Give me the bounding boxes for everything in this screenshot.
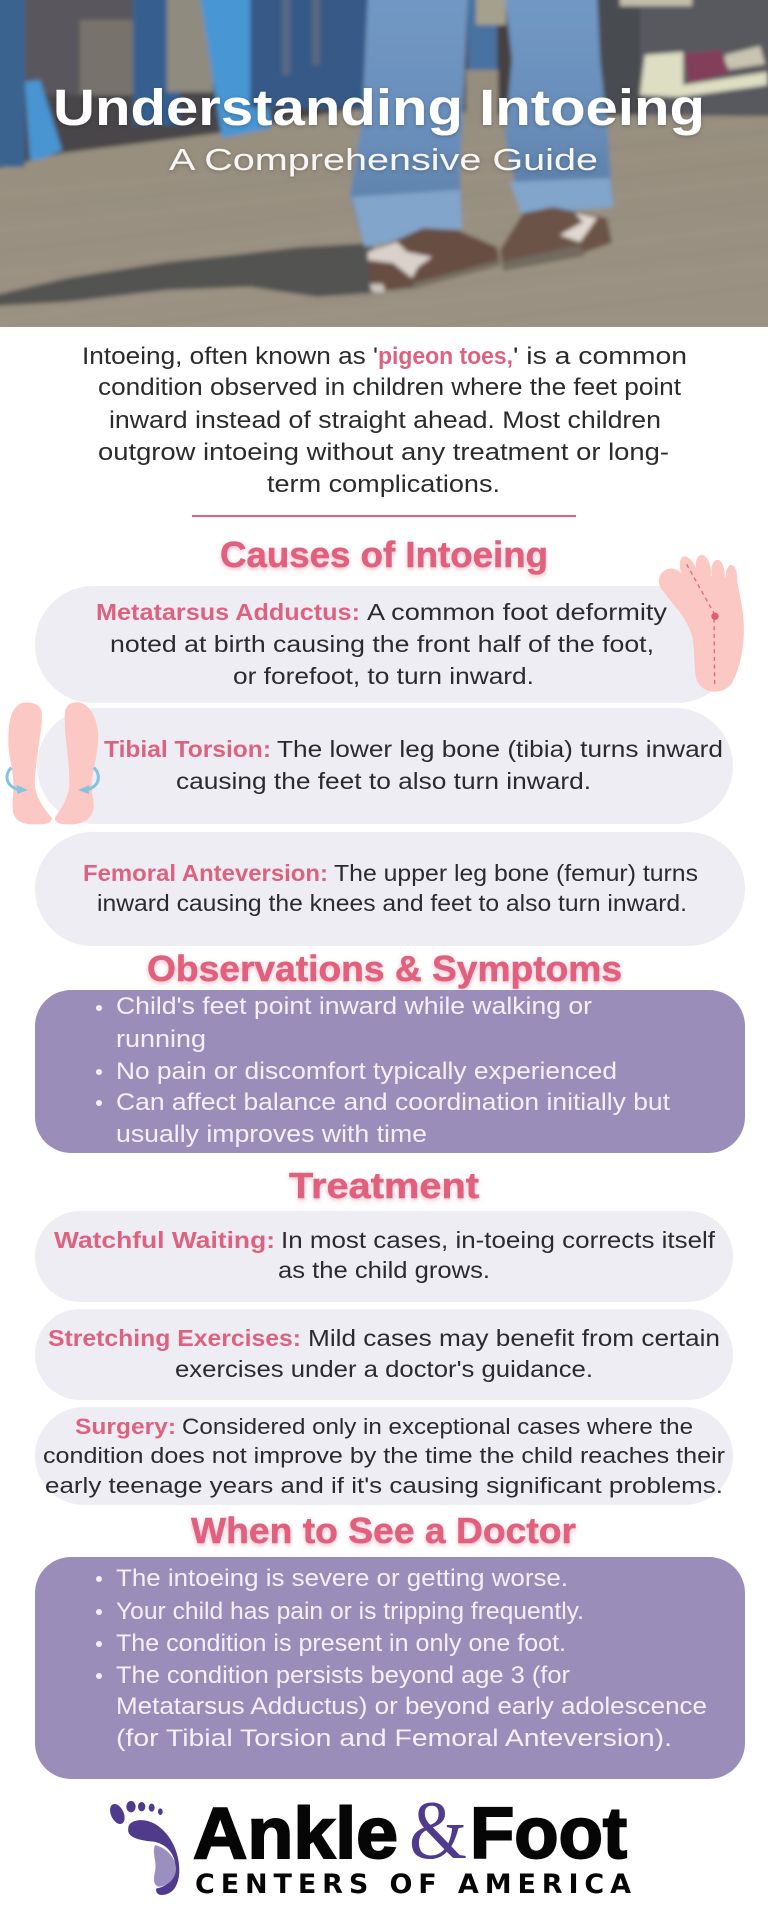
panel: observations and symptoms: Can affect balance and coordination initially but: [116, 1089, 670, 1116]
panel: watchful waiting: as the child grows.: [278, 1257, 490, 1283]
panel: watchful waiting: In most cases, in-toeing corrects itself: [281, 1227, 716, 1253]
panel: when to see a doctor: The condition persists beyond age 3 (for: [116, 1662, 570, 1689]
hero pale overlay: [0, 0, 768, 327]
heading: treatment: Treatment: [289, 1165, 479, 1206]
panel: observations and symptoms: running: [116, 1026, 206, 1053]
intro paragraph: outgrow intoeing without any treatment or long-: [98, 439, 669, 466]
panel: femoral anteversion: [35, 832, 745, 946]
heading: observations: Observations & Symptoms: [147, 948, 622, 989]
panel: metatarsus adductus: [35, 586, 735, 703]
panel: femoral anteversion: Femoral Anteversion:: [83, 860, 328, 886]
panel: observations and symptoms: usually improves with time: [116, 1121, 427, 1148]
panel: metatarsus adductus: A common foot deformity: [367, 599, 667, 625]
intro paragraph: Intoeing, often known as ': [82, 343, 378, 370]
panel: metatarsus adductus: Metatarsus Adductus:: [96, 599, 360, 625]
panel: tibial torsion: [37, 708, 733, 824]
panel: observations and symptoms: [35, 990, 745, 1153]
heading: causes: Causes of Intoeing: [220, 534, 548, 575]
logo: Ankle & Foot Centers of America: CENTERS OF AMERICA: [195, 1869, 631, 1900]
panel: watchful waiting: [35, 1211, 733, 1302]
icon: purple footprint: [107, 1801, 179, 1895]
panel: stretching exercises: Mild cases may benefit from certain: [308, 1325, 720, 1351]
icon: foot with deformity line: [654, 554, 744, 692]
panel: stretching exercises: [35, 1309, 733, 1400]
panel: when to see a doctor: The condition is present in only one foot.: [116, 1630, 566, 1657]
panel: stretching exercises: Stretching Exercises:: [48, 1325, 301, 1351]
panel: femoral anteversion: The upper leg bone (femur) turns: [334, 860, 698, 886]
panel: surgery: condition does not improve by the time the child reaches their: [43, 1443, 726, 1468]
panel: tibial torsion: Tibial Torsion:: [104, 736, 271, 762]
panel: when to see a doctor: The intoeing is severe or getting worse.: [116, 1565, 568, 1592]
panel: observations and symptoms: No pain or discomfort typically experienced: [116, 1058, 617, 1085]
wood plank streaks: [0, 120, 768, 328]
panel: tibial torsion: The lower leg bone (tibia) turns inward: [277, 736, 723, 762]
panel: when to see a doctor: Your child has pain or is tripping frequently.: [116, 1598, 584, 1625]
panel: metatarsus adductus: noted at birth causing the front half of the foot,: [110, 631, 654, 657]
icon: legs with inward rotation arrows: [7, 702, 98, 824]
panel: metatarsus adductus: or forefoot, to turn inward.: [233, 663, 534, 689]
jeans: [350, 0, 468, 247]
panel: surgery: Surgery:: [75, 1414, 176, 1439]
panel: tibial torsion: causing the feet to also turn inward.: [176, 768, 591, 794]
logo: Ankle & Foot Centers of America: Foot: [470, 1794, 627, 1874]
heading: when to see a doctor: When to See a Doctor: [191, 1510, 576, 1551]
logo: Ankle & Foot Centers of America: &: [409, 1784, 467, 1877]
panel: when to see a doctor: [35, 1557, 745, 1779]
shoes: [368, 228, 500, 292]
intro paragraph: pigeon toes,: [378, 343, 513, 370]
panel: surgery: [35, 1407, 733, 1505]
panel: observations and symptoms: Child's feet point inward while walking or: [116, 993, 592, 1020]
intro paragraph: term complications.: [267, 471, 500, 498]
panel: surgery: Considered only in exceptional cases where the: [182, 1414, 693, 1439]
hero photo: child's legs in jeans and brown shoes on a boardwalk: [0, 0, 768, 335]
panel: when to see a doctor: Metatarsus Adductus) or beyond early adolescence: [116, 1693, 707, 1720]
panel: stretching exercises: exercises under a doctor's guidance.: [175, 1356, 593, 1382]
panel: femoral anteversion: inward causing the knees and feet to also turn inward.: [97, 890, 687, 916]
intro paragraph: condition observed in children where the feet point: [98, 374, 681, 401]
panel: watchful waiting: Watchful Waiting:: [54, 1227, 275, 1253]
logo: Ankle & Foot Centers of America: Ankle: [193, 1794, 398, 1874]
intro paragraph: inward instead of straight ahead. Most children: [109, 407, 661, 434]
title: Understanding Intoeing: [53, 79, 705, 136]
panel: when to see a doctor: (for Tibial Torsion and Femoral Anteversion).: [116, 1725, 672, 1752]
logo: Ankle & Foot Centers of America: [107, 1784, 631, 1900]
subtitle: A Comprehensive Guide: [169, 142, 598, 177]
panel: surgery: early teenage years and if it's causing significant problems.: [45, 1473, 723, 1498]
intro paragraph: [82, 343, 687, 498]
shadow on boardwalk: [0, 243, 376, 306]
intro paragraph: ' is a common: [513, 343, 687, 370]
